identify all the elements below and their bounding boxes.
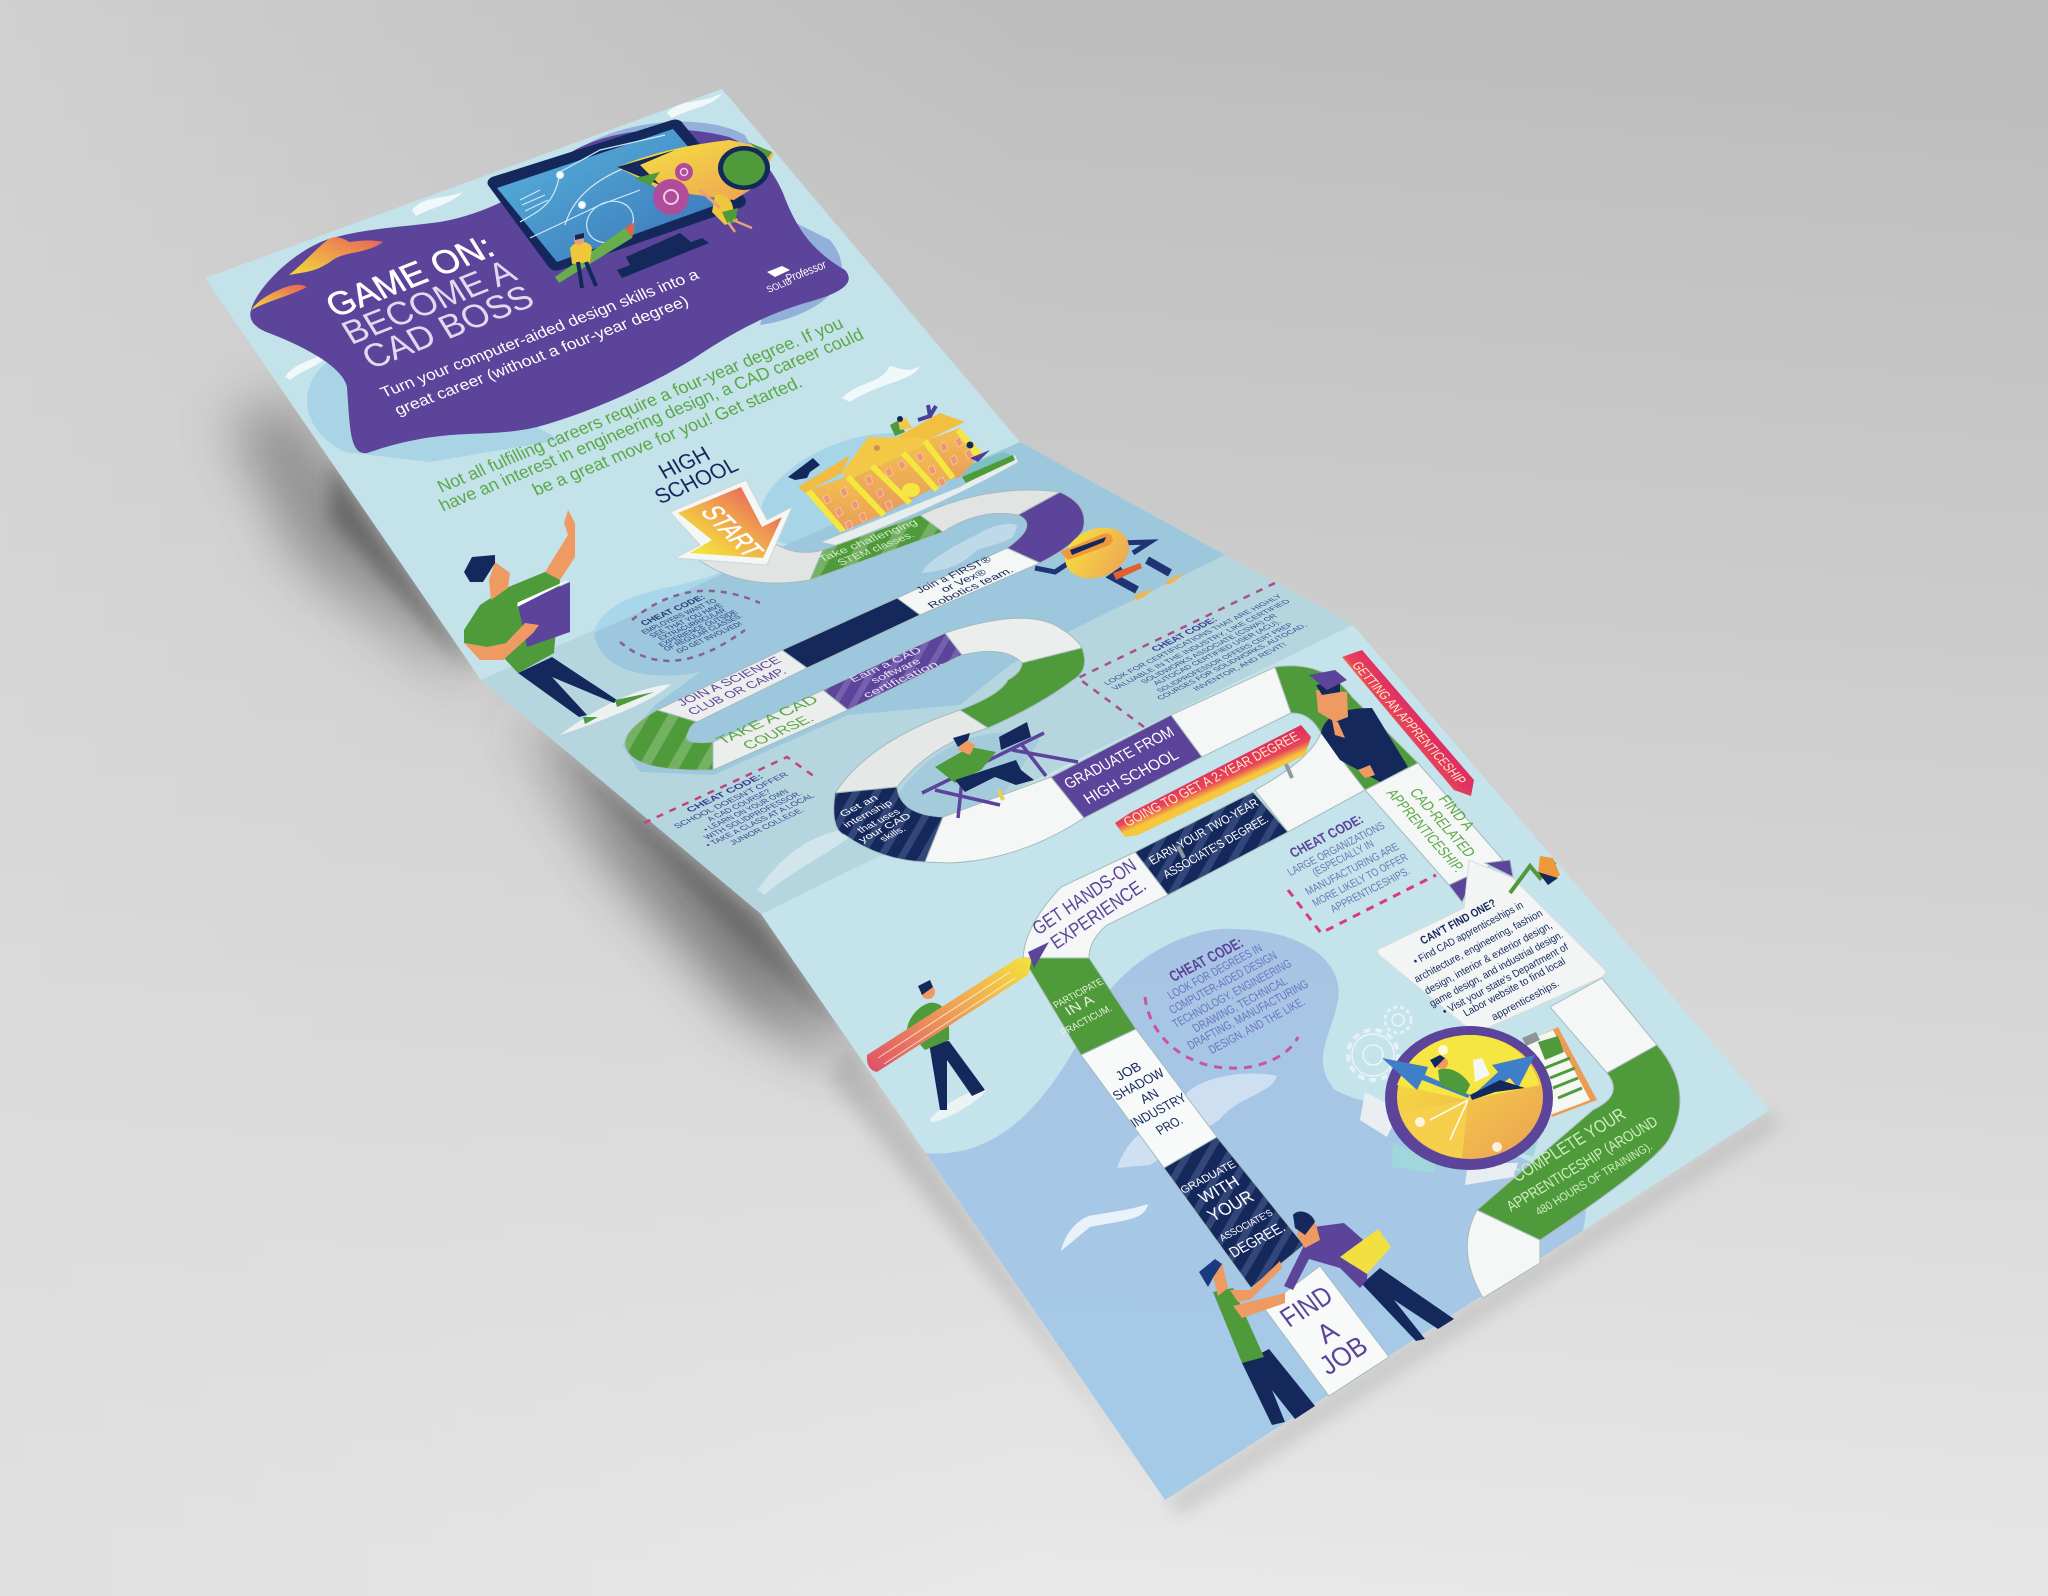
- cheat code: large organizations: LARGE ORGANIZATIONS: [1286, 820, 1387, 879]
- cheat code: certifications: AUTOCAD CERTIFIED USER (ACU).: [1151, 619, 1283, 686]
- cheat code: associate degrees: DESIGN, AND THE LIKE.: [1206, 995, 1308, 1057]
- sign: getting an apprenticeship: [1342, 650, 1474, 796]
- road labels: second branch: ASSOCIATE'S: [1218, 1208, 1275, 1244]
- road labels: second branch: YOUR: [1204, 1187, 1258, 1226]
- cheat code: extracurriculars: EXTRACURRICULAR: [656, 607, 728, 642]
- cheat code: no CAD course: • TAKE A CLASS AT A LOCAL: [703, 792, 817, 848]
- orange clouds on header: [251, 237, 383, 310]
- popup: can't find one: • Find CAD apprenticeships in: [1411, 900, 1526, 967]
- sign: going to get a 2-year degree: [1115, 725, 1311, 858]
- cheat code: extracurriculars: OF REGULAR CLASSES.: [661, 612, 745, 652]
- icon: graduate figure: [1309, 670, 1408, 782]
- icon: paper stacks: [1360, 1092, 1538, 1185]
- road labels: final bend: 480 HOURS OF TRAINING).: [1533, 1140, 1655, 1218]
- road labels: first bend: or Vex®: [939, 568, 990, 594]
- cheat code: associate degrees: CHEAT CODE:: [1166, 935, 1247, 985]
- road labels: second branch: INDUSTRY: [1128, 1091, 1190, 1131]
- popup: can't find one: apprenticeships.: [1489, 978, 1562, 1023]
- cheat code: no CAD course: • LEARN ON YOUR OWN: [701, 788, 791, 833]
- road labels: second branch: ASSOCIATE'S DEGREE.: [1160, 812, 1271, 881]
- cheat code: associate degrees: LOOK FOR DEGREES IN: [1165, 941, 1265, 1002]
- sign: going to get a 2-year degree: GOING TO GET A 2-YEAR DEGREE: [1121, 729, 1302, 830]
- popup: can't find one: Labor website to find local: [1461, 956, 1568, 1019]
- start arrow: [670, 480, 792, 565]
- road labels: final bend: APPRENTICESHIP.: [1382, 787, 1468, 875]
- cheat code: large organizations: APPRENTICESHIPS.: [1329, 866, 1412, 915]
- road labels: second branch: IN A: [1062, 992, 1098, 1019]
- road labels: first bend: STEM classes.: [835, 530, 917, 568]
- cheat code: no CAD course: WITH SOLIDPROFESSOR.: [702, 790, 804, 841]
- cheat code: certifications: INVENTOR, AND REVIT!: [1190, 641, 1289, 692]
- icon: clock with person: [1382, 1026, 1553, 1170]
- cheat code: certifications: COURSES FOR SOLIDWORKS, AUTOCAD,: [1154, 622, 1309, 701]
- cheat code: extracurriculars: [620, 591, 760, 661]
- cheat code: extracurriculars: GO GET INVOLVED!: [674, 620, 744, 654]
- popup: can't find one: design, interior & exterior design,: [1422, 920, 1554, 997]
- road labels: first bend: Earn a CAD: [847, 646, 925, 684]
- cheat code: certifications: LOOK FOR CERTIFICATIONS THAT ARE HIGHLY: [1101, 593, 1284, 686]
- road labels: second branch: GRADUATE: [1179, 1159, 1239, 1196]
- road labels: first bend: TAKE A CAD: [713, 693, 823, 747]
- road labels: first bend: [674, 518, 1182, 845]
- icon: gears: [1348, 1007, 1411, 1080]
- cheat code: extracurriculars: EXPERIENCE OUTSIDE: [656, 608, 740, 648]
- cheat code: no CAD course: CHEAT CODE:: [684, 773, 766, 814]
- cheat code: large organizations: (ESPECIALLY IN: [1311, 839, 1376, 879]
- logo: SOLID: [765, 277, 795, 295]
- icon: man carrying pencil: [867, 942, 1049, 1126]
- road labels: first bend: internship: [841, 799, 895, 830]
- icon: student holding book: [464, 510, 671, 735]
- cheat code: large organizations: CHEAT CODE:: [1287, 812, 1367, 861]
- road labels: first bend: CLUB OR CAMP.: [684, 666, 789, 717]
- road labels: second branch: EARN YOUR TWO-YEAR: [1146, 796, 1261, 867]
- road labels: first bend: Get an: [837, 793, 881, 819]
- road labels: first bend: JOIN A SCIENCE: [674, 655, 784, 708]
- icon: monitor with car drawing: [488, 120, 774, 278]
- cheat code: large organizations: [1286, 812, 1436, 933]
- cheat code: no CAD course: SCHOOL DOESN'T OFFER: [672, 771, 791, 830]
- cheat code: extracurriculars: SEE THAT YOU HAVE: [647, 601, 725, 639]
- cheat code: no CAD course: A CAD COURSE?: [705, 788, 773, 823]
- subtitle: great career (without a four-year degree): [391, 292, 692, 419]
- road labels: final bend: CAD-RELATED: [1406, 786, 1479, 860]
- road labels: second branch: AN: [1137, 1086, 1162, 1107]
- popup: can't find one: game design, and industrial design.: [1427, 929, 1566, 1010]
- cheat code: associate degrees: TECHNOLOGY, ENGINEERING: [1170, 957, 1294, 1031]
- road labels: first bend: Join a FIRST®: [914, 555, 995, 595]
- road labels: first bend: certification.: [861, 658, 945, 700]
- popup: can't find one: architecture, engineering, fashion: [1412, 908, 1545, 985]
- cheat code: extracurriculars: CHEAT CODE:: [639, 594, 708, 628]
- road labels: final bend: COMPLETE YOUR: [1508, 1105, 1630, 1187]
- sign: getting an apprenticeship: GETTING AN APPRENTICESHIP: [1348, 660, 1469, 787]
- title: BECOME A: [335, 252, 523, 351]
- road labels: first bend: that uses: [855, 807, 903, 835]
- cheat code: associate degrees: COMPUTER-AIDED DESIGN: [1166, 949, 1279, 1017]
- road label: find a job: [1275, 1281, 1374, 1381]
- cheat code: associate degrees: DRAWING, TECHNICAL: [1190, 974, 1290, 1035]
- intro text: Not all fulfilling careers require a four-year degree. If you: [434, 314, 847, 497]
- road labels: first bend: COURSE.: [739, 712, 818, 752]
- logo: Professor: [783, 258, 829, 285]
- high school label: HIGH: [654, 442, 714, 483]
- title: CAD BOSS: [355, 278, 541, 376]
- cheat code: certifications: VALUABLE IN THE INDUSTRY, LIKE CERTIFIED: [1109, 598, 1292, 691]
- cheat code: certifications: CHEAT CODE:: [1149, 616, 1220, 653]
- road: second branch: [1023, 733, 1389, 1396]
- icon: clipboard: [1518, 1027, 1597, 1117]
- road label: find a job: JOB: [1314, 1331, 1374, 1381]
- start arrow: START: [693, 502, 770, 561]
- title: GAME ON:: [318, 227, 501, 324]
- road labels: second branch: EXPERIENCE.: [1047, 874, 1150, 954]
- popup: can't find one: [1377, 860, 1605, 1032]
- road labels: first bend: skills.: [878, 825, 909, 844]
- intro text: have an interest in engineering design, a CAD career could: [436, 325, 867, 516]
- cheat code: no CAD course: [644, 757, 817, 848]
- road: first bend: [625, 490, 1513, 902]
- icon: high school building: [788, 405, 1018, 545]
- intro text: be a great move for you! Get started.: [529, 373, 806, 500]
- cheat code: associate degrees: DRAFTING, MANUFACTURING: [1185, 977, 1311, 1052]
- cheat code: large organizations: MORE LIKELY TO OFFER: [1311, 852, 1410, 909]
- icon: robot: [1035, 518, 1183, 600]
- road labels: first bend: Take challenging: [816, 518, 920, 564]
- cheat code: extracurriculars: EMPLOYERS WANT TO: [639, 597, 719, 636]
- cheat code: no CAD course: JUNIOR COLLEGE.: [727, 806, 806, 846]
- cheat code: associate degrees: [1145, 935, 1311, 1068]
- road labels: second branch: PARTICIPATE: [1052, 977, 1106, 1011]
- subtitle: Turn your computer-aided design skills into a: [377, 266, 702, 401]
- road labels: final bend: FIND A: [1434, 793, 1478, 833]
- road labels: second branch: [1029, 796, 1289, 1261]
- road label: find a job: FIND: [1275, 1281, 1339, 1333]
- cheat code: certifications: SOLIDPROFESSOR OFFERS CERT PREP: [1154, 621, 1295, 694]
- header panel: purple blob: [250, 122, 849, 462]
- road labels: second branch: JOB: [1113, 1060, 1145, 1084]
- cheat code: large organizations: MANUFACTURING ARE: [1303, 841, 1402, 898]
- road labels: second branch: PRACTICUM.: [1059, 1004, 1114, 1038]
- icon: student at desk: [922, 722, 1078, 818]
- road labels: first bend: GRADUATE FROM: [1061, 723, 1178, 792]
- road label: find a job: A: [1311, 1316, 1345, 1350]
- cheat code: certifications: SOLIDWORKS ASSOCIATE (CSWA) OR: [1138, 613, 1279, 685]
- road: final bend: [1467, 978, 1680, 1298]
- road labels: first bend: your CAD: [856, 812, 914, 845]
- cheat code: certifications: [1078, 583, 1309, 727]
- folded paper: [205, 89, 1770, 1510]
- road labels: first bend: HIGH SCHOOL: [1080, 746, 1182, 807]
- high school label: SCHOOL: [650, 453, 742, 508]
- road labels: second branch: DEGREE.: [1226, 1219, 1289, 1261]
- road labels: final bend: APPRENTICESHIP (AROUND: [1503, 1113, 1661, 1215]
- title: [318, 227, 541, 376]
- road labels: final bend: [1382, 786, 1661, 1218]
- icon: small figure on the sign: [1510, 856, 1560, 893]
- road labels: second branch: PRO.: [1154, 1113, 1186, 1138]
- popup: can't find one: • Visit your state's Department of: [1440, 941, 1571, 1018]
- road labels: first bend: Robotics team.: [926, 566, 1016, 610]
- road labels: second branch: WITH: [1195, 1172, 1243, 1207]
- icon: small figures with pencil: [555, 190, 752, 288]
- road labels: second branch: GET HANDS-ON: [1029, 855, 1140, 939]
- logo: [765, 258, 829, 295]
- clouds: [285, 93, 1277, 1251]
- popup: can't find one: CAN'T FIND ONE?: [1418, 897, 1498, 947]
- road labels: first bend: software: [868, 657, 924, 685]
- road labels: second branch: SHADOW: [1110, 1066, 1168, 1104]
- icon: handshake figures: [1199, 1211, 1454, 1425]
